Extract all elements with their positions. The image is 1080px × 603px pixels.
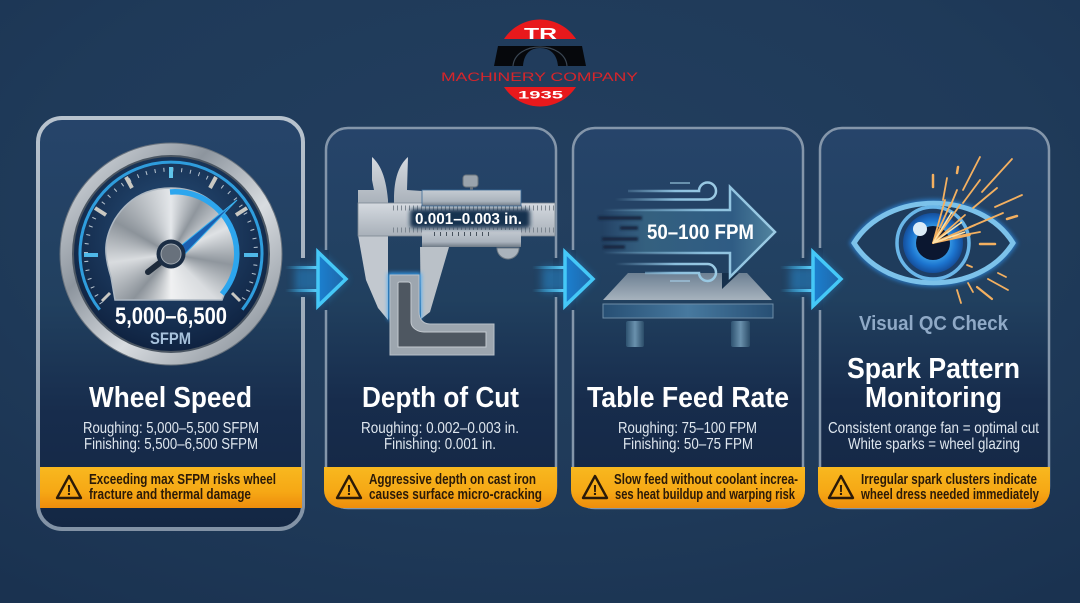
heading: spark pattern monitoring bbox=[847, 353, 1020, 414]
feed arrow: 50–100 FPM bbox=[647, 221, 754, 244]
callout: wheel speed warning: Exceeding max SFPM risks wheel bbox=[89, 472, 276, 488]
gauge value: 5,000–6,500 bbox=[115, 303, 227, 330]
panel: spark pattern monitoring bbox=[818, 128, 1050, 508]
text: wheel speed values: Roughing: 5,000–5,500 SFPM bbox=[83, 420, 259, 437]
text: table feed values bbox=[618, 420, 757, 453]
callout: table feed warning: Slow feed without coolant increa- bbox=[614, 472, 798, 488]
logo: TR Machinery Company 1935 bbox=[441, 20, 638, 106]
icon: speed gauge: SFPM bbox=[150, 329, 191, 348]
callout: depth of cut warning: ! bbox=[346, 482, 352, 499]
callout: wheel speed warning: fracture and thermal damage bbox=[89, 487, 251, 503]
gauge needle bbox=[148, 200, 237, 272]
text: wheel speed values: Finishing: 5,500–6,500 SFPM bbox=[84, 436, 258, 453]
logo: TR Machinery Company 1935: TR bbox=[524, 26, 558, 43]
heading: depth of cut: Depth of Cut bbox=[362, 382, 519, 414]
workpiece: cast iron angle bbox=[390, 275, 494, 355]
callout: wheel speed warning bbox=[40, 467, 302, 508]
callout: depth of cut warning: causes surface micro-cracking bbox=[369, 487, 542, 503]
arrow: depth of cut to table feed bbox=[532, 250, 595, 310]
icon: caliper bbox=[358, 157, 555, 355]
text: spark pattern notes bbox=[828, 420, 1039, 453]
callout: table feed warning: ! bbox=[592, 482, 598, 499]
feed arrow bbox=[598, 187, 775, 277]
icon: moving table with arrow bbox=[598, 182, 775, 347]
text: table feed values: Finishing: 50–75 FPM bbox=[623, 436, 753, 453]
panel: wheel speed bbox=[38, 118, 303, 529]
callout: depth of cut warning: Aggressive depth on cast iron bbox=[369, 472, 536, 488]
text: depth of cut values: Finishing: 0.001 in. bbox=[384, 436, 496, 453]
logo: TR Machinery Company 1935: MACHINERY COMPANY bbox=[441, 70, 638, 84]
gauge brushed plate bbox=[106, 188, 234, 300]
text: spark pattern notes: Consistent orange fan = optimal cut bbox=[828, 420, 1039, 437]
callout: spark pattern warning: wheel dress needed immediately bbox=[860, 487, 1039, 503]
icon: eye with sparks bbox=[854, 157, 1022, 303]
subheading: visual QC check: Visual QC Check bbox=[859, 313, 1009, 335]
heading: spark pattern monitoring: Monitoring bbox=[865, 382, 1002, 414]
arrow: wheel speed to depth of cut bbox=[285, 250, 348, 310]
callout: table feed warning bbox=[571, 467, 805, 508]
callout: depth of cut warning bbox=[324, 467, 557, 508]
panel: table feed rate bbox=[571, 128, 805, 508]
table bbox=[603, 273, 773, 347]
callout: spark pattern warning bbox=[818, 467, 1050, 508]
caliper value label: 0.001–0.003 in. bbox=[415, 211, 522, 228]
text: wheel speed values bbox=[83, 420, 259, 453]
icon: speed gauge bbox=[60, 143, 282, 365]
panel: depth of cut bbox=[324, 128, 557, 508]
callout: spark pattern warning: Irregular spark clusters indicate bbox=[861, 472, 1037, 488]
speed swooshes bbox=[615, 182, 716, 281]
text: depth of cut values bbox=[361, 420, 519, 453]
callout: spark pattern warning: ! bbox=[838, 482, 844, 499]
callout: table feed warning: ses heat buildup and warping risk bbox=[615, 487, 796, 503]
heading: wheel speed: Wheel Speed bbox=[89, 382, 252, 414]
sparks bbox=[933, 157, 1022, 303]
callout: wheel speed warning: ! bbox=[66, 482, 72, 499]
text: spark pattern notes: White sparks = wheel glazing bbox=[848, 436, 1020, 453]
arrow: table feed to spark monitoring bbox=[780, 248, 843, 310]
text: depth of cut values: Roughing: 0.002–0.003 in. bbox=[361, 420, 519, 437]
heading: spark pattern monitoring: Spark Pattern bbox=[847, 353, 1020, 385]
logo: TR Machinery Company 1935: 1935 bbox=[518, 90, 563, 102]
text: table feed values: Roughing: 75–100 FPM bbox=[618, 420, 757, 437]
heading: table feed rate: Table Feed Rate bbox=[587, 382, 789, 414]
